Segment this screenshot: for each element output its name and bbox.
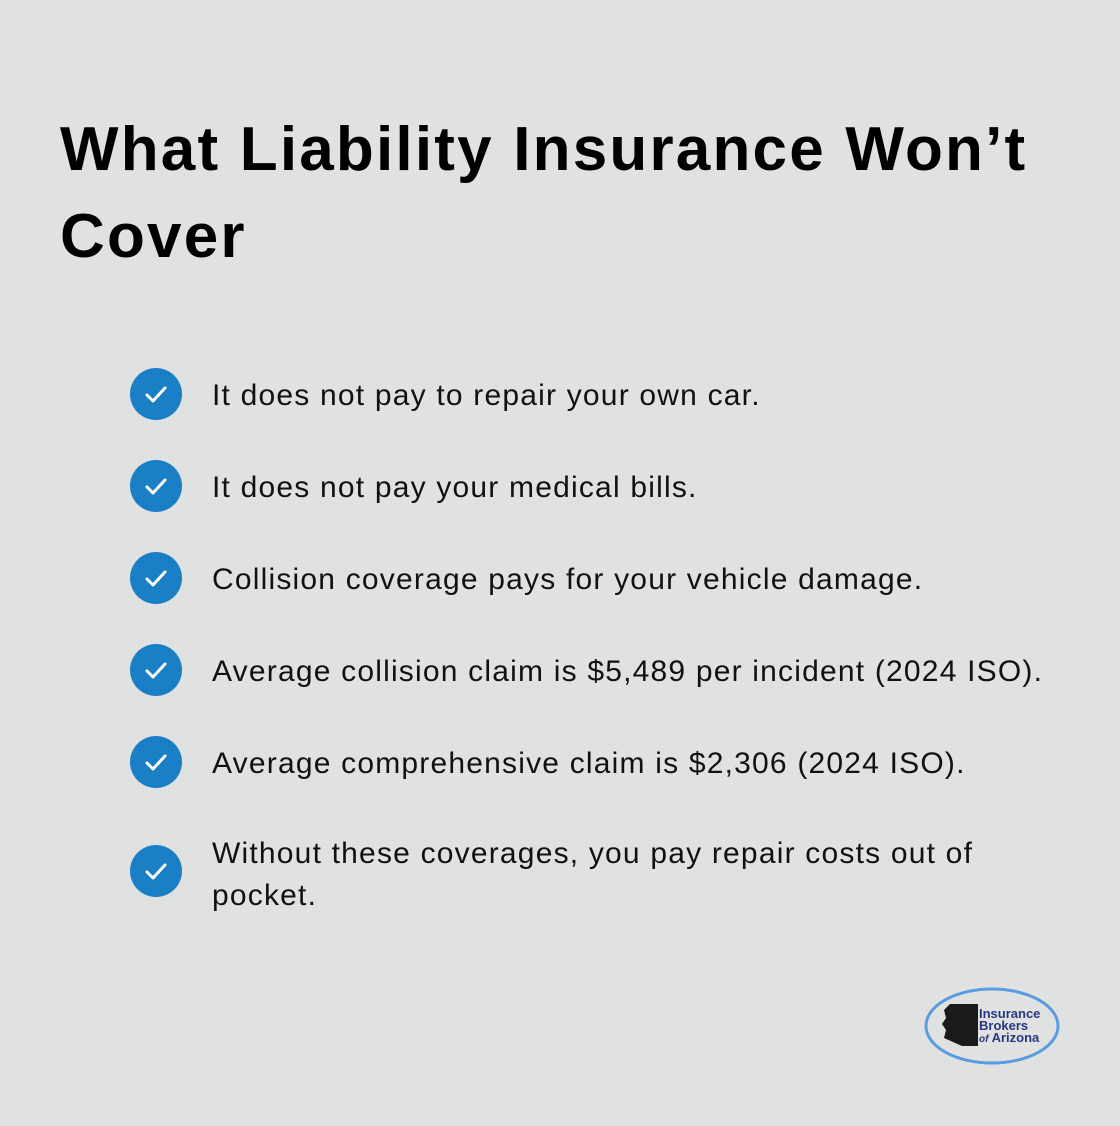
item 2: It does not pay your medical bills. [212, 471, 698, 504]
item 4: Average collision claim is $5,489 per incident (2024 ISO). [212, 655, 1043, 688]
item 1: It does not pay to repair your own car. [212, 379, 761, 412]
logo: Insurance [979, 1006, 1040, 1021]
icon: check [130, 368, 182, 420]
item 5 [130, 736, 966, 788]
item 6: Without these coverages, you pay repair costs out of [212, 837, 973, 870]
logo: of Arizona [979, 1030, 1040, 1045]
item 3 [130, 552, 923, 604]
icon: check [130, 644, 182, 696]
icon: check [130, 845, 182, 897]
logo: Brokers [979, 1018, 1028, 1033]
icon: check [130, 460, 182, 512]
icon: check [130, 552, 182, 604]
icon: check [130, 736, 182, 788]
item 1 [130, 368, 761, 420]
item 5: Average comprehensive claim is $2,306 (2024 ISO). [212, 747, 966, 780]
item 4 [130, 644, 1043, 696]
item 6: pocket. [212, 879, 317, 912]
item 6 [130, 837, 973, 912]
title: What Liability Insurance Won’t Cover [60, 115, 1027, 271]
item 2 [130, 460, 698, 512]
logo [924, 988, 1060, 1064]
item 3: Collision coverage pays for your vehicle damage. [212, 563, 923, 596]
